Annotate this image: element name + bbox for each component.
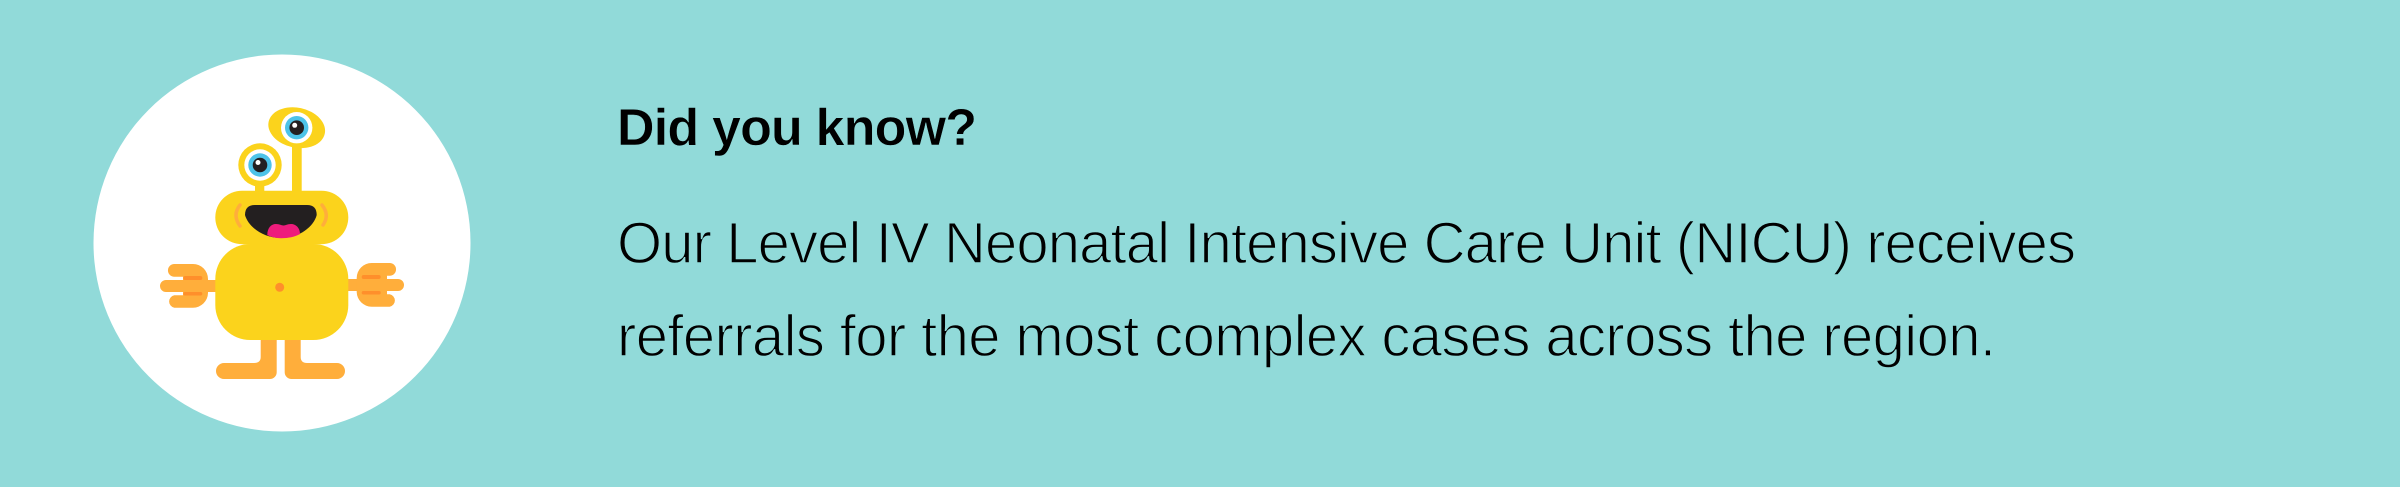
- mouth: [245, 205, 317, 238]
- body text: [617, 211, 2076, 369]
- tongue: [267, 224, 300, 238]
- lower eye: [238, 143, 282, 187]
- lower eye stalk: [255, 183, 264, 193]
- left leg and foot: [216, 338, 277, 379]
- illustration: yellow monster: [160, 102, 404, 379]
- illustration: white circle badge: [94, 54, 470, 432]
- body text: Our Level IV Neonatal Intensive Care Unit (NICU) receives: [617, 211, 2076, 276]
- body text: referrals for the most complex cases across the region.: [617, 304, 1996, 369]
- upper eye: [264, 102, 329, 153]
- upper eye stalk: [292, 145, 302, 193]
- body: [215, 244, 348, 340]
- head: [215, 191, 348, 244]
- left cheek: [236, 205, 240, 226]
- right hand: [346, 263, 404, 307]
- right leg and foot: [285, 338, 345, 379]
- right cheek: [322, 205, 326, 225]
- navel: [275, 283, 284, 292]
- heading: Did you know?: [617, 99, 977, 157]
- left hand: [160, 264, 217, 308]
